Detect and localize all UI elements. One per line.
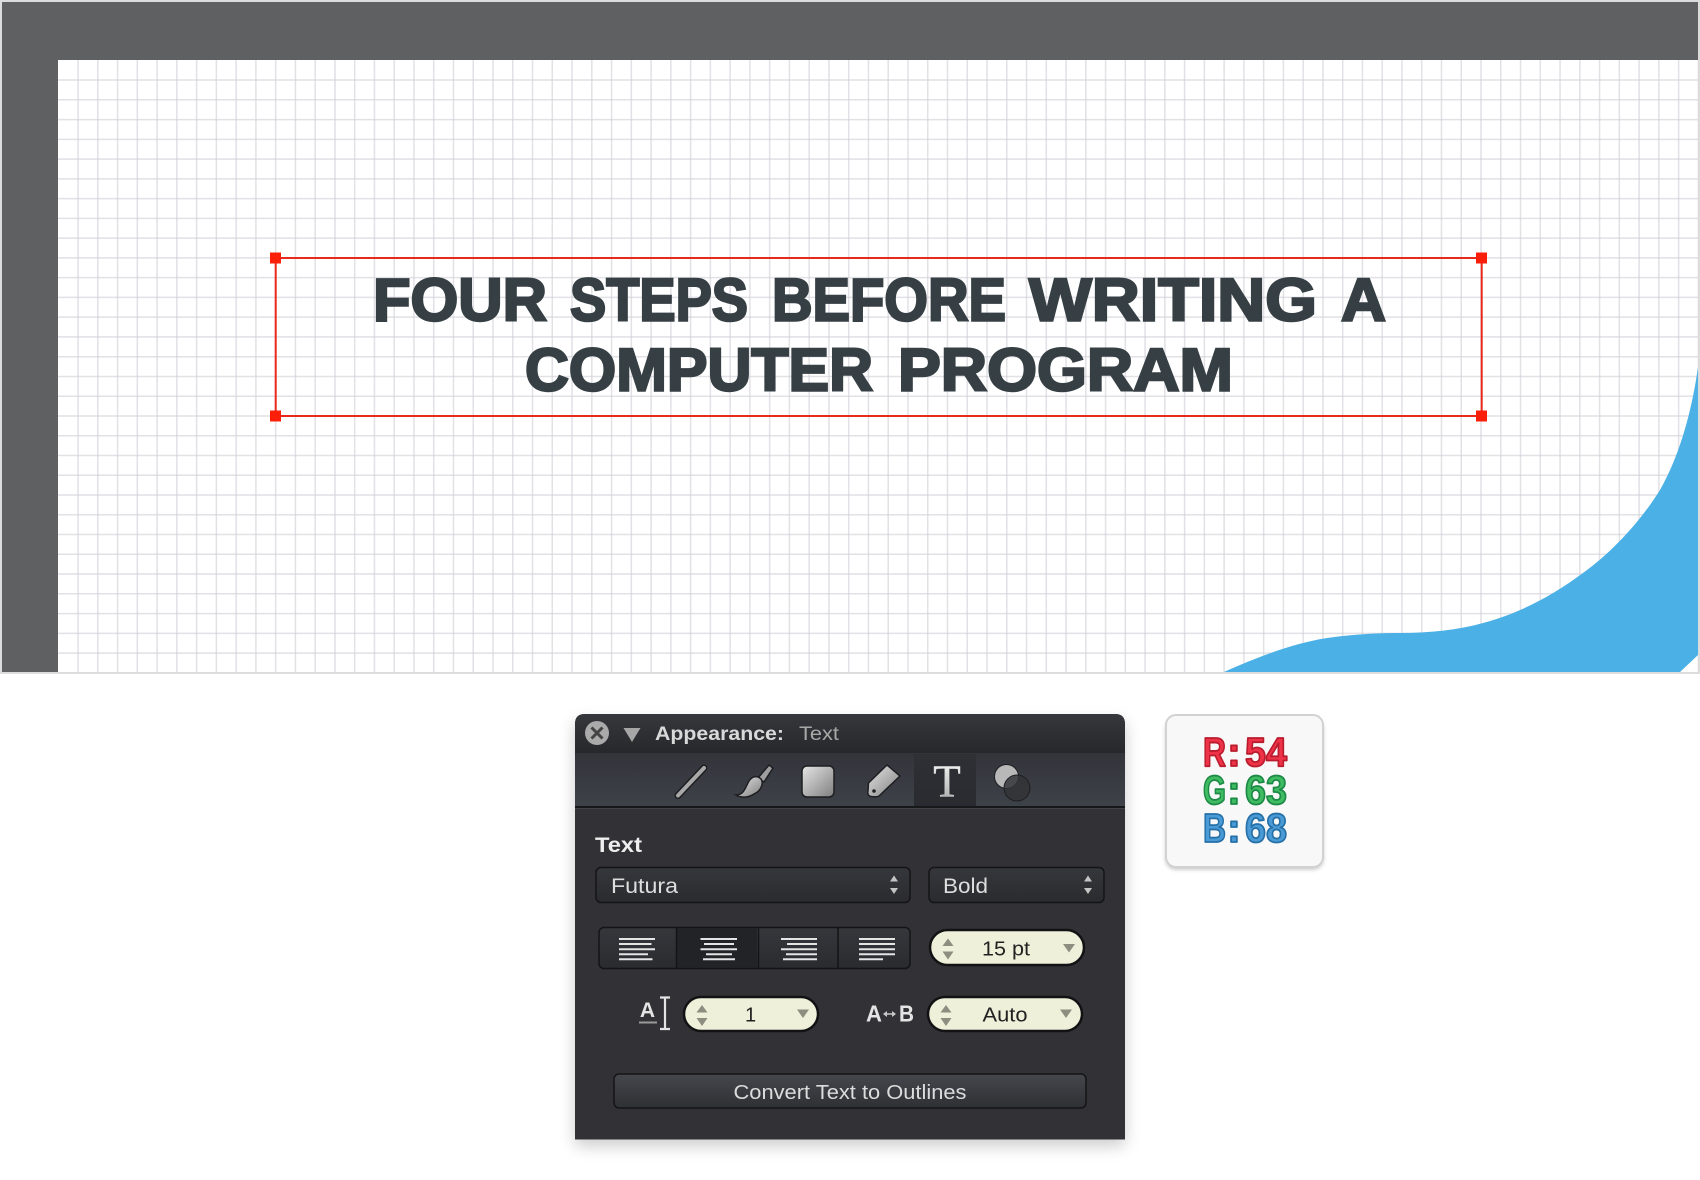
palette header xyxy=(575,714,1125,753)
panel: artboard canvas xyxy=(0,0,1700,674)
field: tracking: Auto xyxy=(982,1004,1028,1026)
colour value: red: : xyxy=(1227,729,1241,775)
icon: fill square xyxy=(802,766,834,797)
heading: text type: Text xyxy=(799,724,840,745)
icon: tracking xyxy=(866,1000,914,1026)
panel: appearance palette xyxy=(575,714,1125,1146)
title: COMPUTER xyxy=(525,336,873,404)
field: font size: 15 pt xyxy=(982,938,1030,960)
title: STEPS xyxy=(570,266,748,334)
grid background xyxy=(58,60,1698,672)
field: leading xyxy=(684,997,818,1031)
colour value: blue xyxy=(1203,805,1287,851)
panel: RGB colour card xyxy=(1166,715,1323,869)
blue curved shape xyxy=(1224,367,1698,672)
colour value: red: 54 xyxy=(1245,729,1287,775)
icon: leading: A xyxy=(640,999,655,1022)
colour value: green xyxy=(1203,767,1287,813)
icon: tracking: B xyxy=(899,1000,914,1026)
heading: appearance: Appearance: xyxy=(655,724,784,745)
title: WRITING xyxy=(1029,266,1317,334)
dropdown: font style: Bold xyxy=(943,875,988,898)
title: A xyxy=(1341,266,1386,334)
colour value: blue: B xyxy=(1203,805,1226,851)
field: tracking xyxy=(928,997,1082,1031)
colour value: red: R xyxy=(1203,729,1226,775)
title: FOUR xyxy=(373,266,547,334)
dropdown: font family: Futura xyxy=(611,875,678,898)
icon: justify xyxy=(859,939,895,959)
icon: text T: T xyxy=(933,756,961,806)
dropdown: font style xyxy=(929,868,1104,902)
ruler frame xyxy=(2,2,1698,672)
button: convert text to outlines: Convert Text to Outlines xyxy=(734,1082,966,1104)
colour value: green: 63 xyxy=(1245,767,1287,813)
selected tab background xyxy=(914,754,976,806)
colour value: green: G xyxy=(1203,767,1226,813)
icon: overlapping circles xyxy=(994,764,1030,801)
title: PROGRAM xyxy=(898,336,1233,404)
icon: brush xyxy=(736,765,773,797)
colour value: blue: 68 xyxy=(1245,805,1287,851)
icon: close button xyxy=(585,721,609,745)
title xyxy=(373,266,1386,404)
icon: align right xyxy=(781,939,817,959)
colour value: red xyxy=(1203,729,1287,775)
icon: align left xyxy=(619,939,655,959)
icon: leading xyxy=(639,998,670,1029)
colour value: green: : xyxy=(1227,767,1241,813)
button: convert text to outlines xyxy=(614,1074,1086,1108)
field: font size xyxy=(930,930,1084,965)
icon: collapse triangle xyxy=(624,728,640,742)
title: BEFORE xyxy=(772,266,1006,334)
dropdown: font family xyxy=(596,868,910,902)
icon: align center xyxy=(700,939,737,959)
field: leading: 1 xyxy=(745,1004,756,1026)
icon: tag xyxy=(868,765,900,797)
icon: stroke line xyxy=(678,768,704,796)
colour value: blue: : xyxy=(1227,805,1241,851)
alignment buttons xyxy=(599,928,910,968)
section label: text: Text xyxy=(595,834,642,857)
toolbar xyxy=(575,753,1125,809)
icon: tracking: A xyxy=(866,1000,882,1026)
selection box xyxy=(270,252,1487,422)
